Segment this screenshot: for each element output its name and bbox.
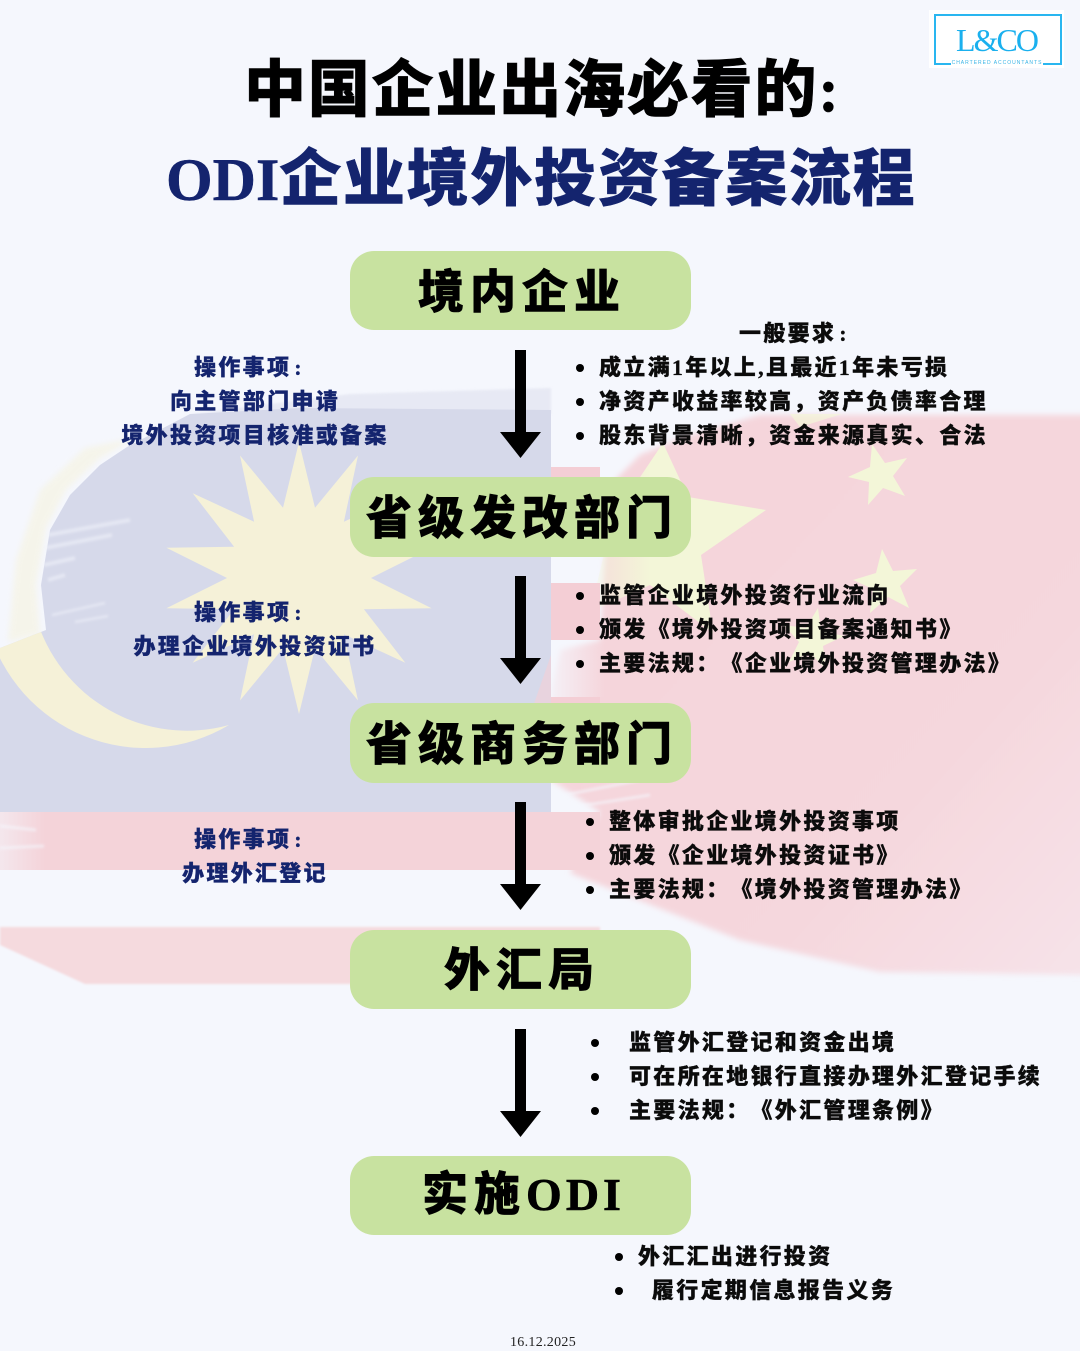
implementation list: 履行定期信息报告义务 <box>652 1278 895 1303</box>
Malaysia flag blue canton <box>0 408 551 812</box>
SAFE duties list <box>591 1030 1042 1123</box>
arrow 1 <box>500 350 541 458</box>
step: 省级商务部门 <box>350 703 691 783</box>
left note 1: 向主管部门申请 <box>170 389 340 414</box>
left note 3: 操作事项: <box>194 827 304 852</box>
logo tagline: CHARTERED ACCOUNTANTS <box>952 60 1042 66</box>
step: 境内企业: 境内企业 <box>418 267 626 318</box>
commerce duties list <box>586 809 974 902</box>
implementation list: 外汇汇出进行投资 <box>638 1244 832 1269</box>
background: Malaysia and China brush flags <box>0 388 1080 984</box>
date: 16.12.2025 <box>510 1335 576 1350</box>
SAFE duties list: 监管外汇登记和资金出境 <box>629 1030 896 1055</box>
commerce duties list: 主要法规：《境外投资管理办法》 <box>609 877 974 902</box>
implementation list <box>615 1244 895 1303</box>
step: 省级商务部门: 省级商务部门 <box>366 719 678 770</box>
Chinese flag stars <box>585 414 917 669</box>
Malaysia fourteen-point star <box>166 442 432 714</box>
arrow 2 <box>500 576 541 684</box>
general requirements heading: 一般要求: <box>739 321 849 346</box>
commerce duties list: 颁发《企业境外投资证书》 <box>609 843 901 868</box>
NDRC duties list: 颁发《境外投资项目备案通知书》 <box>599 617 964 642</box>
title line 2: ODI企业境外投资备案流程 <box>166 146 916 214</box>
SAFE duties list: 主要法规：《外汇管理条例》 <box>629 1098 945 1123</box>
left note 2: 操作事项: <box>194 600 304 625</box>
logo wordmark: L&CO <box>956 22 1037 58</box>
general requirements list <box>576 355 988 448</box>
NDRC duties list: 主要法规：《企业境外投资管理办法》 <box>599 651 1012 676</box>
Malaysia flag red stripes <box>0 467 600 984</box>
general requirements list: 成立满1年以上,且最近1年未亏损 <box>599 355 949 380</box>
left note 1: 境外投资项目核准或备案 <box>121 423 389 448</box>
NDRC duties list: 监管企业境外投资行业流向 <box>599 583 891 608</box>
step: 实施ODI: 实施ODI <box>422 1169 625 1220</box>
commerce duties list: 整体审批企业境外投资事项 <box>609 809 901 834</box>
left note 2 <box>133 600 376 659</box>
general requirements list: 股东背景清晰，资金来源真实、合法 <box>599 423 988 448</box>
NDRC duties list <box>576 583 1012 676</box>
pale brush band above canton <box>190 388 551 414</box>
logo border <box>934 14 1062 65</box>
left note 1: 操作事项: <box>194 355 304 380</box>
arrow 3 <box>500 802 541 910</box>
left note 3 <box>182 827 328 886</box>
left note 3: 办理外汇登记 <box>182 861 328 886</box>
general requirements list: 净资产收益率较高，资产负债率合理 <box>599 389 988 414</box>
Malaysia crescent lower arc <box>0 632 228 748</box>
step: 省级发改部门: 省级发改部门 <box>366 493 678 544</box>
left note 1 <box>121 355 389 448</box>
step: 外汇局 <box>350 930 691 1009</box>
left note 2: 办理企业境外投资证书 <box>133 634 376 659</box>
China flag field <box>551 415 1080 975</box>
step: 境内企业 <box>350 251 691 330</box>
step: 省级发改部门 <box>350 477 691 557</box>
SAFE duties list: 可在所在地银行直接办理外汇登记手续 <box>629 1064 1042 1089</box>
arrow 4 <box>500 1029 541 1137</box>
step: 外汇局: 外汇局 <box>444 945 600 996</box>
pale upper crescent wash <box>8 438 135 642</box>
logo: L&CO Chartered Accountants <box>929 10 1064 68</box>
step: 实施ODI <box>350 1156 691 1235</box>
title line 1: 中国企业出海必看的: <box>244 57 841 125</box>
